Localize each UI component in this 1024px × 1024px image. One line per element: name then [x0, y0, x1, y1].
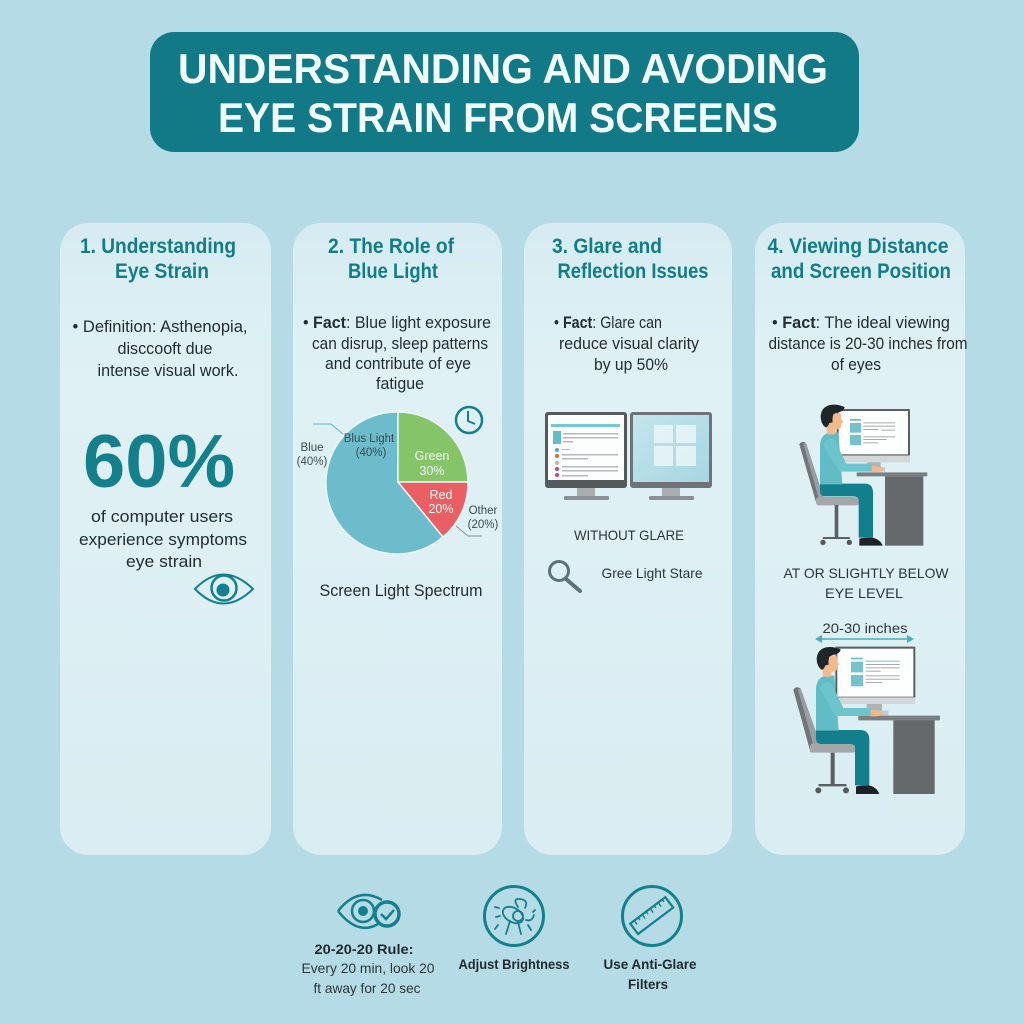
label: without glare: WITHOUT GLARE: [574, 527, 684, 543]
icon: eye: [195, 574, 253, 604]
icon: magnifier: [550, 562, 580, 591]
glare fact: by up 50%: [594, 355, 668, 374]
pie chart: screen light spectrum: Blue: [300, 442, 324, 454]
pie chart: screen light spectrum: Green: [415, 449, 449, 463]
icon: clock: [456, 407, 482, 433]
statistic caption: of computer users: [91, 507, 233, 526]
glare fact: reduce visual clarity: [559, 334, 699, 353]
blue light fact: and contribute of eye: [325, 354, 471, 373]
statistic: 60%: 60%: [83, 419, 235, 503]
pie chart: screen light spectrum: 20%: [428, 502, 454, 516]
heading: viewing distance: [768, 235, 951, 283]
heading: viewing distance: and Screen Position: [771, 260, 951, 283]
tip: adjust brightness: Adjust Brightness: [458, 956, 570, 972]
panel: glare and reflection: [524, 223, 732, 855]
blue light fact: can disrup, sleep patterns: [312, 334, 488, 353]
title: EYE STRAIN FROM SCREENS: [218, 94, 778, 141]
blue light fact: • Fact: Blue light exposure: [303, 313, 491, 332]
pie chart: screen light spectrum: 30%: [419, 464, 445, 478]
label: distance measure: 20-30 inches: [822, 620, 908, 636]
heading: understanding eye strain: Eye Strain: [115, 260, 209, 283]
heading: glare: 3. Glare and: [552, 235, 662, 258]
label: light stare: Gree Light Stare: [602, 565, 703, 581]
tip: adjust brightness: [458, 886, 570, 972]
label: eye level: AT OR SLIGHTLY BELOW: [784, 565, 949, 581]
statistic caption: eye strain: [126, 552, 202, 571]
tip: anti-glare filters: [604, 886, 697, 992]
panel: role of blue light: [293, 223, 502, 855]
tip: 20-20-20 rule: [302, 895, 435, 996]
pie chart: screen light spectrum: (20%): [468, 519, 499, 531]
panel: understanding eye strain: [60, 223, 271, 855]
head: [821, 405, 845, 434]
heading: glare: Reflection Issues: [558, 260, 708, 283]
definition text: [72, 317, 248, 380]
heading: blue light: Blue Light: [348, 260, 438, 283]
statistic caption: experience symptoms: [79, 530, 247, 549]
pie chart: screen light spectrum: Other: [469, 505, 498, 517]
viewing fact: of eyes: [831, 355, 881, 374]
monitor with glare: [630, 412, 712, 500]
chart caption: Screen Light Spectrum: [320, 581, 482, 600]
heading: glare: [552, 235, 708, 283]
viewing fact: [768, 313, 968, 374]
icon: eye with check: [338, 895, 399, 928]
blue light fact: [303, 313, 491, 393]
definition text: • Definition: Asthenopia,: [72, 317, 248, 336]
statistic caption: [79, 507, 247, 571]
tip: 20-20-20 rule: Every 20 min, look 20: [302, 960, 435, 976]
tip: anti-glare filters: Filters: [628, 976, 668, 992]
heading: viewing distance: 4. Viewing Distance: [768, 235, 948, 258]
heading: understanding eye strain: [80, 235, 236, 283]
definition text: intense visual work.: [98, 361, 238, 380]
definition text: disccooft due: [118, 339, 212, 358]
monitor without glare: [545, 412, 627, 500]
label: eye level: [784, 565, 949, 601]
illustration: person at desk, upper: [799, 405, 927, 546]
icon: ruler: [622, 886, 682, 946]
label: distance measure: [815, 620, 914, 643]
title: [150, 32, 859, 152]
viewing fact: • Fact: The ideal viewing: [772, 313, 950, 332]
heading: understanding eye strain: 1. Understanding: [80, 235, 236, 258]
pie chart: screen light spectrum: Red: [430, 488, 453, 502]
icon: brightness: [484, 886, 544, 946]
heading: blue light: 2. The Role of: [328, 235, 455, 258]
viewing fact: distance is 20-30 inches from: [768, 334, 968, 353]
head: [817, 647, 841, 677]
label: eye level: EYE LEVEL: [825, 585, 903, 601]
tip: 20-20-20 rule: 20-20-20 Rule:: [314, 941, 414, 957]
title: UNDERSTANDING AND AVODING: [178, 45, 828, 92]
blue light fact: fatigue: [376, 374, 424, 393]
pie chart: screen light spectrum: (40%): [356, 447, 387, 459]
tip: 20-20-20 rule: ft away for 20 sec: [314, 980, 420, 996]
pie chart: screen light spectrum: (40%): [297, 456, 328, 468]
glare fact: [554, 313, 699, 374]
panel: viewing distance: [755, 223, 968, 855]
illustration: person at desk, lower: [793, 647, 940, 794]
glare fact: • Fact: Glare can: [554, 313, 662, 332]
tip: anti-glare filters: Use Anti-Glare: [604, 956, 697, 972]
pie chart: screen light spectrum: Blus Light: [344, 433, 395, 445]
heading: blue light: [328, 235, 455, 283]
pie chart: screen light spectrum: [297, 412, 499, 554]
